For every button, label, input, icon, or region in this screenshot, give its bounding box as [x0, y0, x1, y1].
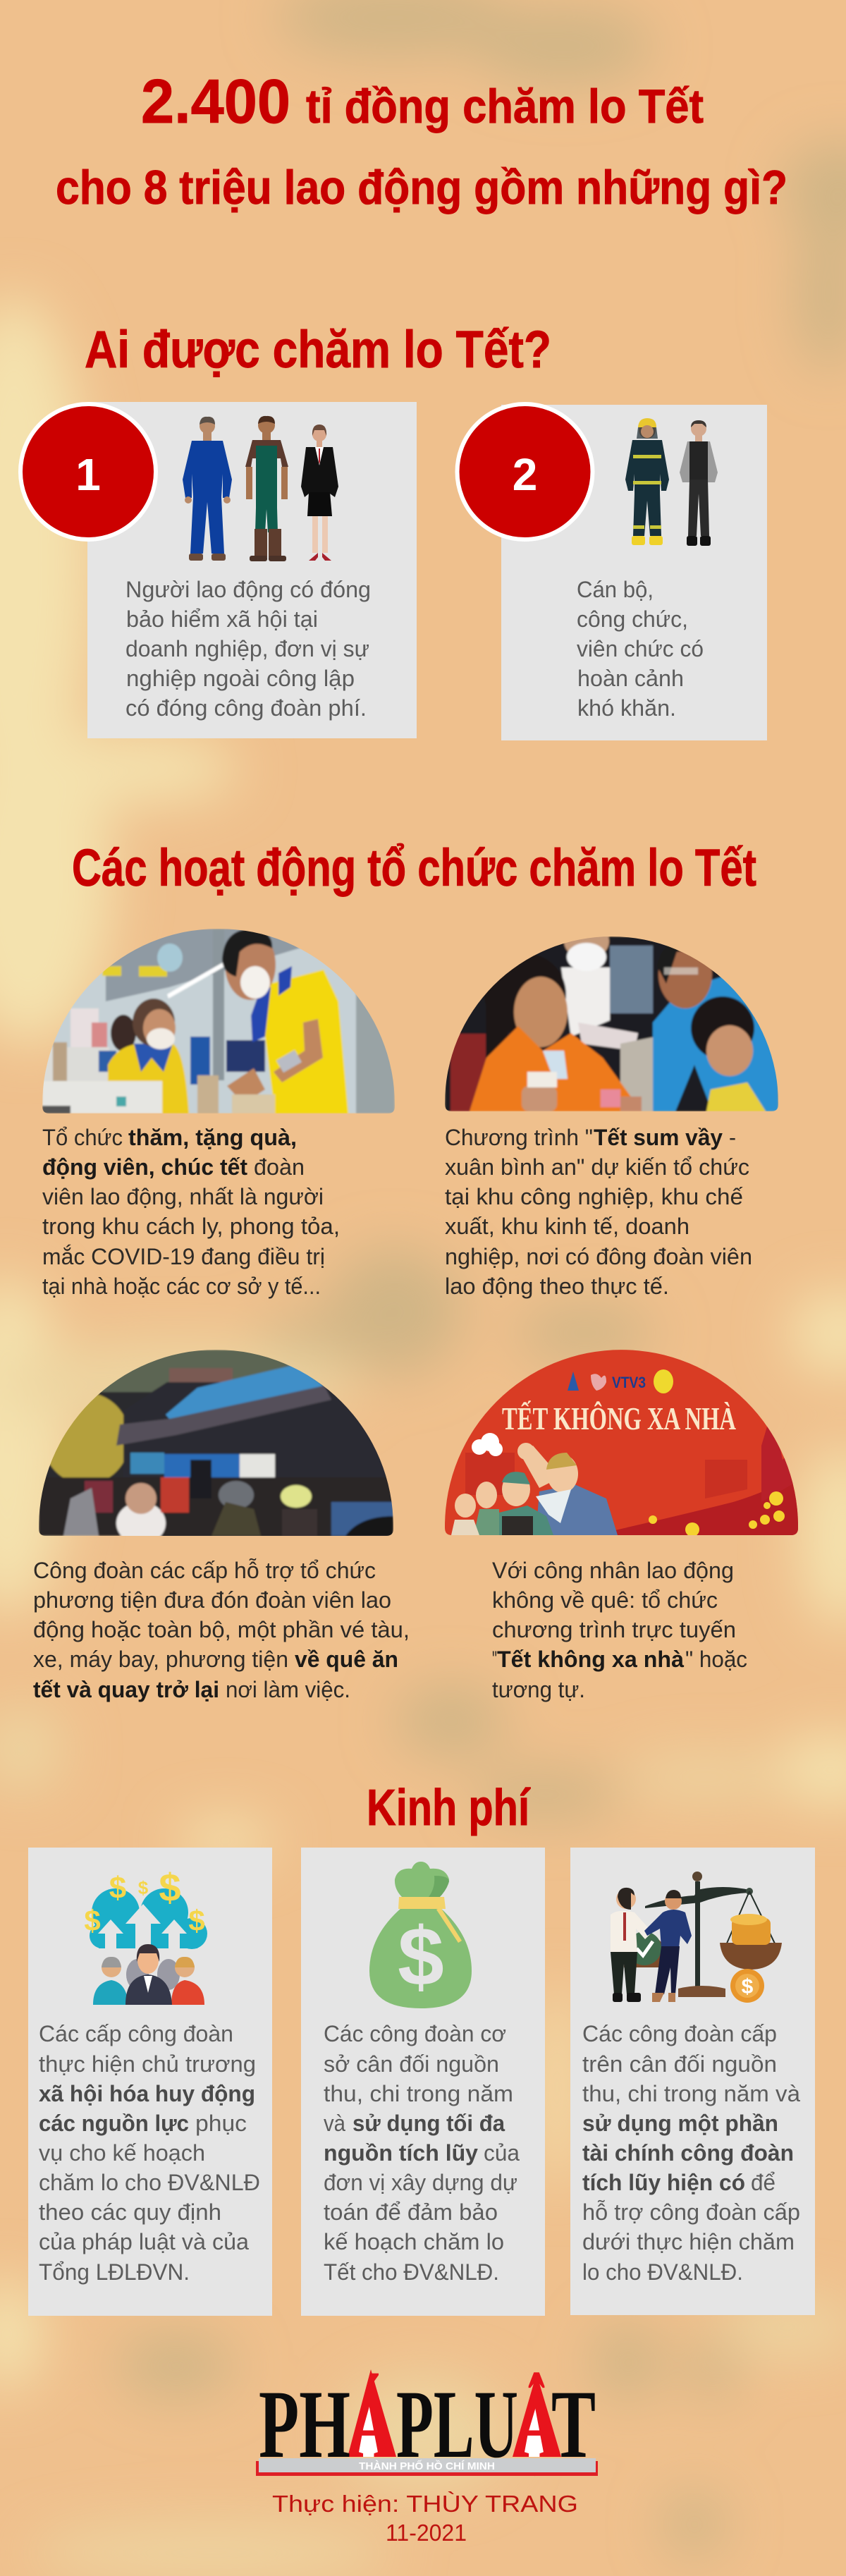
text block: và — [324, 2111, 345, 2136]
text block: các nguồn lực — [39, 2111, 189, 2136]
text block: thu, chi trong năm — [324, 2081, 513, 2106]
text block: Tết cho ĐV&NLĐ. — [324, 2259, 499, 2285]
number badge 2: 2 — [513, 449, 537, 500]
text block: tài chính công đoàn — [582, 2140, 794, 2166]
panel: funding card 1 — [28, 1848, 272, 2316]
credit — [272, 2491, 578, 2546]
text block: của pháp luật và của — [39, 2229, 249, 2254]
text block: visits: Tổ chức — [42, 1125, 123, 1150]
logo: Pháp Luật: Ậ — [518, 2370, 555, 2478]
text block: transport: tết và quay trở lại — [33, 1677, 219, 1702]
title: 2.400 — [141, 66, 290, 136]
text block: thu, chi trong năm và — [582, 2081, 800, 2106]
text block: transport: động hoặc toàn bộ, một phần vé tàu, — [33, 1617, 410, 1642]
logo: Pháp Luật: T — [551, 2370, 596, 2478]
text block — [324, 2021, 520, 2285]
icon: three workers — [183, 416, 338, 561]
text block: reunion programme: Tết sum vầy — [594, 1125, 723, 1150]
logo: Pháp Luật: THÀNH PHỐ HỒ CHÍ MINH — [359, 2460, 495, 2472]
text block: visits: trong khu cách ly, phong tỏa, — [42, 1214, 340, 1239]
text block: công chức, — [577, 606, 688, 632]
icon: fundraising people and cloud: $ — [109, 1871, 126, 1905]
logo: Pháp Luật — [256, 2369, 598, 2478]
text block: phục — [195, 2111, 247, 2136]
logo: Pháp Luật: PLU — [396, 2370, 518, 2478]
text block: visits — [42, 1125, 340, 1299]
text block: visits: viên lao động, nhất là người — [42, 1184, 324, 1209]
number badge 1 — [20, 404, 156, 539]
text block: sử dụng một phần — [582, 2111, 778, 2136]
text block: bảo hiểm xã hội tại — [126, 606, 318, 632]
photo: workers receiving gifts — [445, 924, 778, 1111]
text block: Cán bộ, — [577, 577, 654, 602]
text block: doanh nghiệp, đơn vị sự — [125, 636, 369, 661]
text block: Các cấp công đoàn — [39, 2021, 233, 2046]
text block: online programme: Tết không xa nhà — [497, 1647, 684, 1672]
text block: viên chức có — [577, 636, 704, 661]
icon: fundraising people and cloud — [84, 1865, 207, 2005]
text block: transport — [33, 1558, 410, 1702]
text block: transport: nơi làm việc. — [226, 1677, 350, 1702]
icon: fundraising people and cloud: $ — [159, 1865, 181, 1910]
credit: 11-2021 — [386, 2520, 467, 2546]
text block: transport: về quê ăn — [295, 1647, 398, 1672]
text block: hoàn cảnh — [577, 666, 684, 691]
text block: online programme: " — [492, 1647, 497, 1672]
text block: nguồn tích lũy — [324, 2140, 478, 2166]
text block: Tổng LĐLĐVN. — [39, 2259, 190, 2285]
text block: online programme: Với công nhân lao động — [492, 1558, 734, 1583]
number badge 2 — [457, 404, 592, 539]
credit: Thực hiện: THÙY TRANG — [272, 2491, 578, 2517]
text block: vụ cho kế hoạch — [39, 2140, 205, 2166]
text block: visits: động viên, chúc tết — [42, 1154, 247, 1180]
text block: online programme: chương trình trực tuyến — [492, 1617, 736, 1642]
text block: reunion programme: tại khu công nghiệp, khu chế — [445, 1184, 743, 1209]
text block: tích lũy hiện có — [582, 2170, 745, 2195]
text block: transport: phương tiện đưa đón đoàn viên lao — [33, 1587, 391, 1613]
heading: funding: Kinh phí — [367, 1780, 531, 1836]
text block — [39, 2021, 260, 2285]
panel: group 2 — [501, 405, 767, 740]
text block: chăm lo cho ĐV&NLĐ — [39, 2170, 260, 2195]
logo: Pháp Luật: PH — [259, 2370, 350, 2478]
text block: để — [751, 2170, 776, 2195]
text block: xã hội hóa huy động — [39, 2081, 255, 2106]
graphic: Tết không xa nhà banner — [445, 1350, 798, 1537]
text block: reunion programme — [445, 1125, 752, 1299]
text block: toán để đảm bảo — [324, 2199, 498, 2225]
text block: nghiệp ngoài công lập — [126, 666, 355, 691]
heading: who receives support: Ai được chăm lo Tết? — [85, 320, 551, 379]
logo: Pháp Luật: Á — [352, 2370, 389, 2478]
icon: fundraising people and cloud: $ — [188, 1904, 205, 1937]
panel: funding card 3 — [570, 1848, 815, 2315]
text block: reunion programme: Chương trình " — [445, 1125, 593, 1150]
text block: Người lao động có đóng — [125, 577, 371, 602]
text block: visits: tại nhà hoặc các cơ sở y tế... — [42, 1274, 321, 1299]
text block: reunion programme: nghiệp, nơi có đông đoàn viên — [445, 1244, 752, 1269]
text block: hỗ trợ công đoàn cấp — [582, 2199, 800, 2225]
icon: fundraising people and cloud: $ — [84, 1904, 101, 1937]
text block: có đóng công đoàn phí. — [125, 695, 367, 721]
text block: thực hiện chủ trương — [39, 2051, 256, 2077]
text block: Các công đoàn cơ — [324, 2021, 506, 2046]
icon: money bag: $ — [398, 1910, 444, 2003]
text block — [577, 577, 704, 721]
photo: factory visit — [42, 929, 395, 1113]
text block: theo các quy định — [39, 2199, 221, 2225]
text block — [125, 577, 371, 721]
text block: reunion programme: lao động theo thực tế. — [445, 1274, 669, 1299]
text block: dưới thực hiện chăm — [582, 2229, 795, 2254]
text block: online programme: " hoặc — [685, 1647, 747, 1672]
icon: money bag — [369, 1862, 472, 2008]
icon: scales and partners: $ — [742, 1975, 754, 1998]
text block: Các công đoàn cấp — [582, 2021, 777, 2046]
text block: visits: mắc COVID-19 đang điều trị — [42, 1244, 325, 1269]
icon: scales and partners — [611, 1872, 782, 2003]
text block: khó khăn. — [577, 695, 676, 721]
panel: funding card 2 — [301, 1848, 545, 2316]
text block: reunion programme: xuân bình an" dự kiến tổ chức — [445, 1154, 749, 1180]
text block: lo cho ĐV&NLĐ. — [582, 2259, 743, 2285]
text block: kế hoạch chăm lo — [324, 2229, 504, 2254]
number badge 1: 1 — [75, 449, 101, 500]
text block: của — [484, 2140, 520, 2166]
logos row — [568, 1369, 673, 1393]
text block — [582, 2021, 800, 2285]
text block: visits: đoàn — [254, 1154, 305, 1180]
text block: reunion programme: - — [729, 1125, 736, 1150]
text block: transport: Công đoàn các cấp hỗ trợ tổ chức — [33, 1558, 376, 1583]
title: tỉ đồng chăm lo Tết — [306, 80, 704, 133]
text block: sở cân đối nguồn — [324, 2051, 499, 2077]
text block: sử dụng tối đa — [352, 2111, 505, 2136]
text block: trên cân đối nguồn — [582, 2051, 777, 2077]
graphic: Tết không xa nhà banner: TẾT KHÔNG XA NHÀ — [502, 1400, 736, 1436]
text block: reunion programme: xuất, khu kinh tế, doanh — [445, 1214, 689, 1239]
text block: online programme: tương tự. — [492, 1677, 585, 1702]
text block: đơn vị xây dựng dự — [324, 2170, 517, 2195]
title — [56, 66, 787, 214]
panel: group 1 — [87, 402, 417, 738]
text block: online programme — [492, 1558, 747, 1702]
photo: bus and crowd — [39, 1350, 393, 1544]
logos row: VTV3 — [612, 1374, 646, 1391]
text block: visits: thăm, tặng quà, — [128, 1125, 297, 1150]
icon: fundraising people and cloud: $ — [138, 1877, 149, 1898]
text block: online programme: không về quê: tổ chức — [492, 1587, 718, 1613]
icon: firefighter and civil servant — [625, 418, 718, 546]
text block: transport: xe, máy bay, phương tiện — [33, 1647, 288, 1672]
